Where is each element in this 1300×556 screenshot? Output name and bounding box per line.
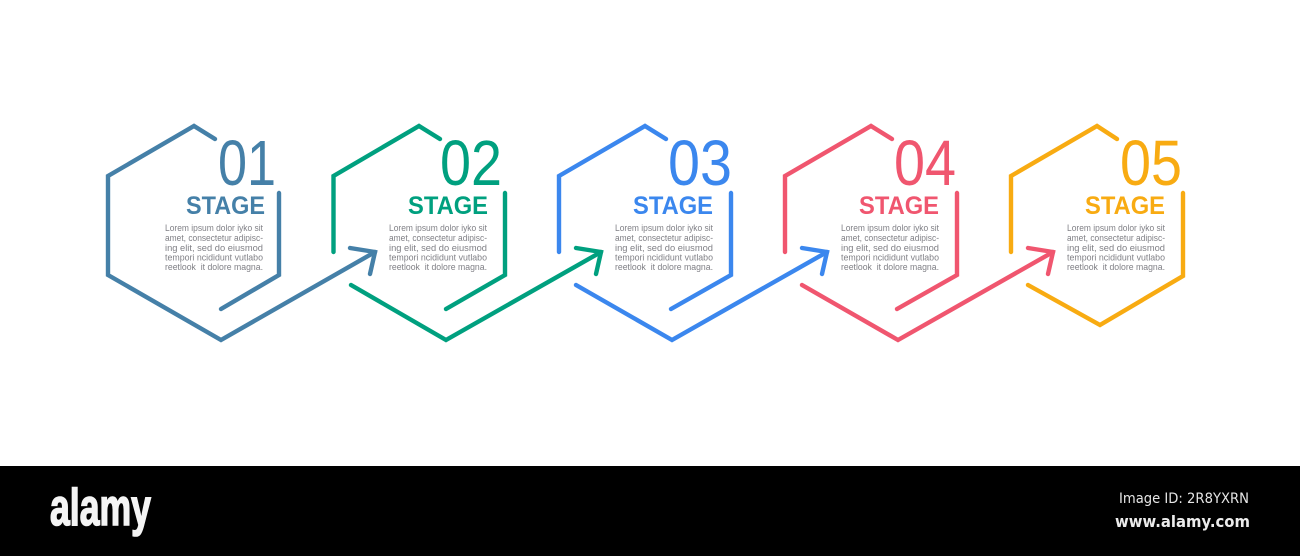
website: www.alamy.com [1115,512,1250,531]
text block: stage 3: ing elit, sed do eiusmod [615,243,713,253]
text block: stage 5: amet, consectetur adipisc- [1067,233,1165,243]
image id: Image ID: 2R8YXRN [1119,491,1249,507]
number 03: 03 [668,127,732,199]
text block: stage 3: reetlook it dolore magna. [615,262,713,272]
number 04: 04 [894,127,956,199]
heading: stage 2: STAGE [408,192,488,220]
text block: stage 5: reetlook it dolore magna. [1067,262,1165,272]
text block: stage 1: tempori ncididunt vutlabo [165,252,263,262]
text block: stage 3: Lorem ipsum dolor iyko sit [615,223,714,233]
number 02: 02 [440,127,502,199]
text block: stage 1: reetlook it dolore magna. [165,262,263,272]
hexagon outline with arrow: stage 1 [108,126,375,340]
text block: stage 3: tempori ncididunt vutlabo [615,252,713,262]
panel: stage 4 [785,126,1053,340]
text block: stage 2: Lorem ipsum dolor iyko sit [389,223,488,233]
text block: stage 4: tempori ncididunt vutlabo [841,252,939,262]
text block: stage 2: reetlook it dolore magna. [389,262,487,272]
heading: stage 1: STAGE [186,192,265,220]
heading: stage 4: STAGE [859,192,939,220]
heading: stage 3: STAGE [633,192,713,220]
text block: stage 1: ing elit, sed do eiusmod [165,243,263,253]
panel: stage 2 [334,126,601,340]
text block: stage 5: ing elit, sed do eiusmod [1067,243,1165,253]
logo: alamy: alamy [50,479,151,537]
text block: stage 4 [841,223,940,272]
panel: stage 3 [559,126,827,340]
text block: stage 5 [1067,223,1166,272]
panel: stage 5 [1011,126,1183,325]
text block: stage 2: ing elit, sed do eiusmod [389,243,487,253]
hexagon outline: stage 5 [1011,126,1183,325]
hexagon outline with arrow: stage 4 [785,126,1053,340]
text block: stage 3: amet, consectetur adipisc- [615,233,713,243]
text block: stage 2: tempori ncididunt vutlabo [389,252,487,262]
text block: stage 5: Lorem ipsum dolor iyko sit [1067,223,1166,233]
text block: stage 2: amet, consectetur adipisc- [389,233,487,243]
text block: stage 4: amet, consectetur adipisc- [841,233,939,243]
panel: stage 1 [108,126,375,340]
text block: stage 3 [615,223,714,272]
footer band [0,466,1300,556]
text block: stage 4: Lorem ipsum dolor iyko sit [841,223,940,233]
text block: stage 5: tempori ncididunt vutlabo [1067,252,1165,262]
text block: stage 2 [389,223,488,272]
text block: stage 1: Lorem ipsum dolor iyko sit [165,223,264,233]
number 01: 01 [218,127,276,199]
text block: stage 4: ing elit, sed do eiusmod [841,243,939,253]
text block: stage 1 [165,223,264,272]
hexagon outline with arrow: stage 2 [334,126,601,340]
text block: stage 4: reetlook it dolore magna. [841,262,939,272]
heading: stage 5: STAGE [1085,192,1165,220]
text block: stage 1: amet, consectetur adipisc- [165,233,263,243]
number 05: 05 [1120,127,1182,199]
hexagon outline with arrow: stage 3 [559,126,827,340]
